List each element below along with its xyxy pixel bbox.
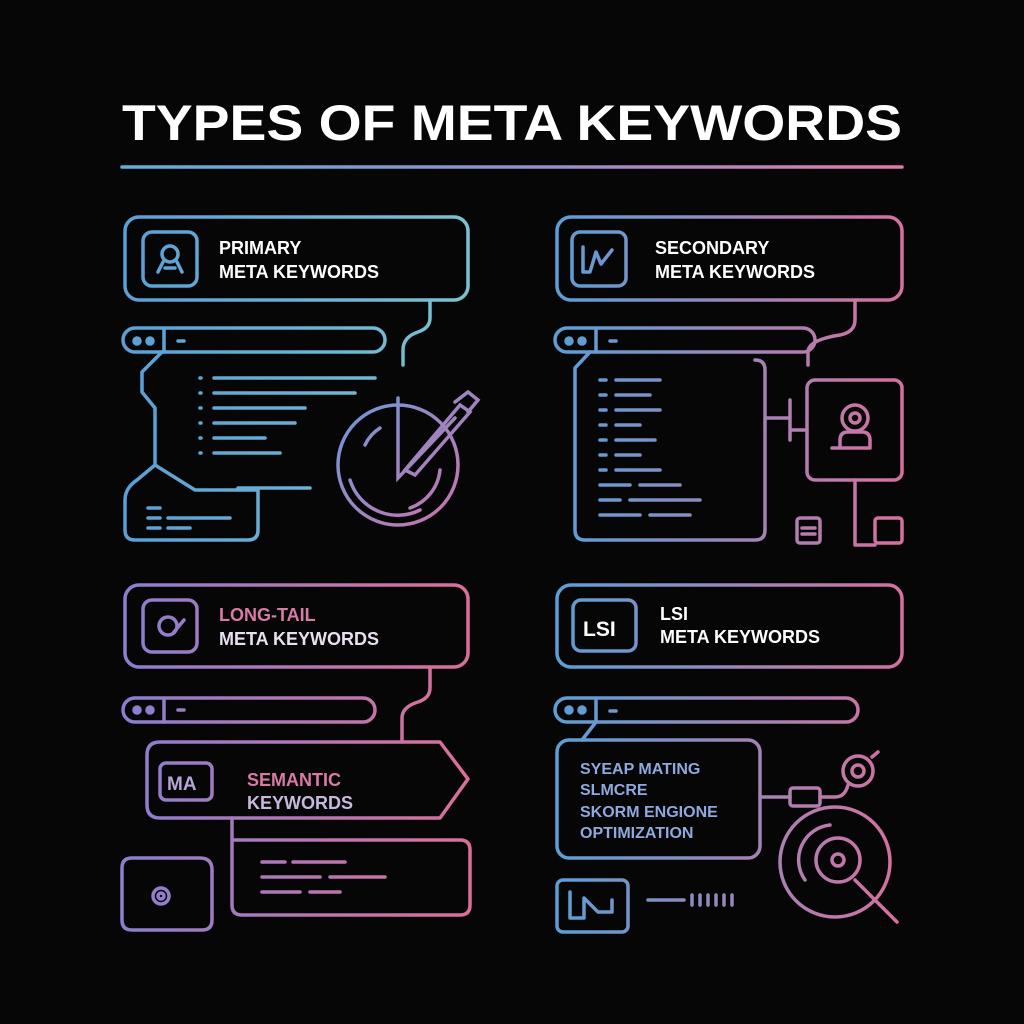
semantic keywords tag: SEMANTIC [247, 770, 341, 790]
header: primary: META KEYWORDS [219, 262, 379, 282]
panel: long-tail [122, 585, 470, 930]
title underline [122, 165, 902, 169]
header: lsi: LSI [583, 618, 616, 641]
header: secondary: SECONDARY [655, 238, 769, 258]
icon: lsi badge with dashes [557, 880, 732, 932]
text box [557, 740, 760, 858]
header: lsi: META KEYWORDS [660, 627, 820, 647]
text box [232, 818, 470, 915]
connector with node [760, 752, 878, 806]
panel: primary [123, 217, 468, 540]
browser bar [123, 328, 385, 352]
panel: secondary [555, 217, 902, 545]
header: lsi: LSI [660, 604, 688, 624]
text box: SLMCRE [580, 782, 648, 799]
header: long-tail: LONG-TAIL [219, 605, 316, 625]
text box: OPTIMIZATION [580, 825, 693, 842]
header: primary [125, 217, 468, 300]
header: long-tail [125, 585, 468, 667]
code window [575, 352, 765, 540]
title: TYPES OF META KEYWORDS [122, 95, 902, 151]
connector [402, 667, 430, 742]
header: lsi [557, 585, 902, 667]
connector [808, 300, 855, 365]
connector [403, 300, 430, 365]
header: primary: PRIMARY [219, 238, 301, 258]
semantic keywords tag: MA [167, 774, 197, 795]
semantic keywords tag: KEYWORDS [247, 793, 353, 813]
text box: SYEAP MATING [580, 761, 700, 778]
browser bar [555, 328, 815, 352]
header: long-tail: META KEYWORDS [219, 629, 379, 649]
icon: target with pen [338, 392, 478, 525]
flowchart and code lines [125, 352, 375, 540]
panel: lsi [555, 585, 902, 932]
header: secondary: META KEYWORDS [655, 262, 815, 282]
browser bar [555, 698, 858, 740]
icon: magnifier [780, 807, 897, 922]
text box: SKORM ENGIONE [580, 804, 718, 821]
icon: webcam box [765, 380, 902, 545]
browser bar [123, 698, 375, 722]
header: secondary [557, 217, 902, 300]
icon: badge [122, 858, 212, 930]
semantic keywords tag [147, 742, 468, 818]
